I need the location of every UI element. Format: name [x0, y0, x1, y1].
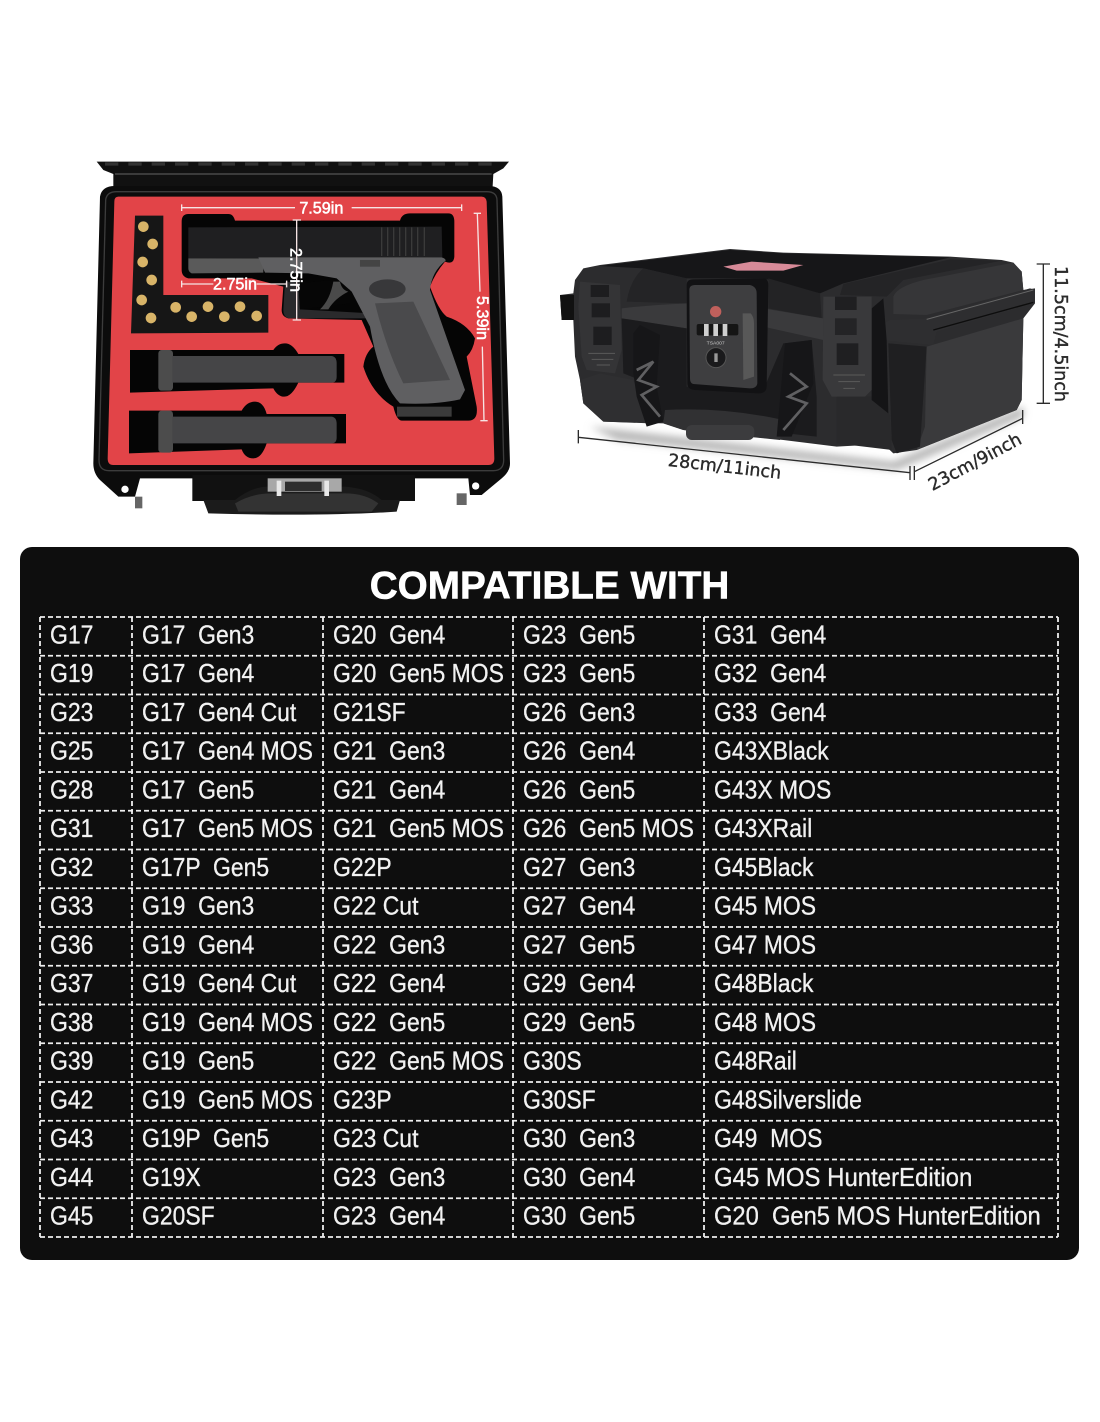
- column 2 models: G20SF: [142, 1203, 215, 1231]
- column 5 models: G33 Gen4: [714, 699, 826, 727]
- column 2 models: G17 Gen4 MOS: [142, 738, 313, 766]
- column 3 models: G23 Cut: [333, 1125, 419, 1154]
- column 1 models: G19: [50, 660, 93, 689]
- column 2 models: G17 Gen4: [142, 660, 254, 689]
- handle and latch: [192, 475, 415, 515]
- column 2 models: [142, 621, 313, 1231]
- closed case with dimensions: [560, 249, 1070, 495]
- column 4 models: G26 Gen5 MOS: [523, 815, 694, 844]
- column 1 models: G17: [50, 621, 93, 650]
- pistol: [188, 227, 465, 417]
- dimension: 2.75in horizontal: [182, 275, 287, 293]
- column 2 models: G19 Gen5: [142, 1048, 254, 1076]
- column 5 models: G47 MOS: [714, 931, 816, 960]
- column 5 models: G31 Gen4: [714, 621, 826, 650]
- column 2 models: G19 Gen5 MOS: [142, 1086, 313, 1115]
- column 5 models: G32 Gen4: [714, 660, 826, 689]
- column 5 models: G43XBlack: [714, 738, 830, 766]
- column 5 models: [714, 621, 1041, 1231]
- column 4 models: G30 Gen5: [523, 1203, 635, 1231]
- panel: compatibility list: [20, 547, 1079, 1260]
- dimension: 28cm/11inch: [578, 430, 910, 484]
- dimension: 2.75in vertical: [286, 220, 304, 320]
- column 1 models: G23: [50, 699, 93, 727]
- dimension: 2.75in vertical: 2.75in: [286, 248, 304, 292]
- column 5 models: G45Black: [714, 854, 814, 882]
- column 5 models: G48 MOS: [714, 1009, 816, 1037]
- dimension: 5.39in: [473, 213, 491, 421]
- lid top face: [600, 250, 950, 293]
- left latch: [560, 282, 622, 373]
- column 4 models: G26 Gen5: [523, 776, 635, 805]
- column 4 models: G29 Gen4: [523, 970, 635, 999]
- column 3 models: G23 Gen4: [333, 1203, 445, 1231]
- column 3 models: G22 Gen5: [333, 1009, 445, 1037]
- column 4 models: G23 Gen5: [523, 621, 635, 650]
- column 5 models: G43XRail: [714, 815, 812, 844]
- dimension: 11.5cm/4.5inch: [1037, 264, 1070, 403]
- column 2 models: G19 Gen4 Cut: [142, 970, 297, 999]
- dimension: 5.39in: 5.39in: [473, 296, 491, 340]
- column 2 models: G19P Gen5: [142, 1125, 269, 1154]
- column 1 models: G42: [50, 1086, 93, 1115]
- column 4 models: G27 Gen4: [523, 893, 635, 921]
- heading: COMPATIBLE WITH: [370, 564, 729, 608]
- column 1 models: G37: [50, 970, 93, 999]
- TSA combination lock: TSA007: [707, 341, 725, 347]
- case right side panels: [837, 263, 1035, 453]
- column 2 models: G17 Gen3: [142, 621, 254, 650]
- case lid hinge strip: [97, 162, 509, 192]
- pistol cutout: [182, 213, 477, 421]
- column 4 models: G30S: [523, 1048, 582, 1076]
- column 1 models: G31: [50, 815, 93, 844]
- column 5 models: G48Rail: [714, 1048, 797, 1076]
- column 4 models: [523, 621, 694, 1231]
- right latch: [823, 297, 872, 397]
- column 3 models: G22 Gen4: [333, 970, 445, 999]
- handle struts: [633, 325, 813, 437]
- column 2 models: G17 Gen5 MOS: [142, 815, 313, 844]
- column 3 models: G21SF: [333, 699, 406, 727]
- column 4 models: G26 Gen4: [523, 738, 635, 766]
- case silhouette: [560, 249, 1035, 453]
- column 2 models: G17P Gen5: [142, 854, 269, 882]
- column 3 models: G21 Gen3: [333, 738, 445, 766]
- column 3 models: G22 Gen5 MOS: [333, 1048, 504, 1076]
- column 1 models: G38: [50, 1009, 93, 1037]
- column 5 models: G45 MOS HunterEdition: [714, 1164, 972, 1192]
- column 1 models: G28: [50, 776, 93, 805]
- column 4 models: G23 Gen5: [523, 660, 635, 689]
- dimension: 7.59in: 7.59in: [299, 199, 343, 217]
- column 3 models: G22 Gen3: [333, 931, 445, 960]
- column 2 models: G19 Gen4: [142, 931, 254, 960]
- column 2 models: G17 Gen5: [142, 776, 254, 805]
- column 3 models: G20 Gen5 MOS: [333, 660, 504, 689]
- tool cutout with gold dots: [131, 216, 268, 333]
- dimension: 7.59in: [182, 199, 462, 217]
- dimension: 28cm/11inch: 28cm/11inch: [667, 451, 782, 484]
- magazine 2: [129, 402, 346, 458]
- TSA combination lock: [687, 278, 768, 393]
- column 3 models: G21 Gen5 MOS: [333, 815, 504, 844]
- column 5 models: G48Black: [714, 970, 814, 999]
- column 5 models: G43X MOS: [714, 776, 831, 805]
- dimension: 11.5cm/4.5inch: 11.5cm/4.5inch: [1050, 266, 1070, 402]
- column 3 models: G21 Gen4: [333, 776, 445, 805]
- table grid: [40, 617, 1058, 1237]
- case front panels: [580, 259, 1002, 440]
- column 3 models: [333, 621, 504, 1231]
- dimension: 23cm/9inch: [914, 410, 1025, 495]
- column 3 models: G22P: [333, 854, 392, 882]
- column 3 models: G22 Cut: [333, 893, 419, 921]
- red foam insert: [108, 197, 494, 465]
- column 1 models: G39: [50, 1048, 93, 1076]
- column 4 models: G27 Gen5: [523, 931, 635, 960]
- column 5 models: G49 MOS: [714, 1125, 822, 1154]
- column 2 models: G17 Gen4 Cut: [142, 699, 297, 727]
- open case with pistol foam insert: [93, 162, 510, 515]
- case body: [93, 186, 510, 508]
- column 1 models: G32: [50, 854, 93, 882]
- column 5 models: G20 Gen5 MOS HunterEdition: [714, 1203, 1041, 1231]
- dimension: 23cm/9inch: 23cm/9inch: [925, 430, 1025, 495]
- column 3 models: G23P: [333, 1086, 392, 1115]
- column 4 models: G30 Gen3: [523, 1125, 635, 1154]
- column 1 models: G33: [50, 893, 93, 921]
- column 1 models: G36: [50, 931, 93, 960]
- column 1 models: G25: [50, 738, 93, 766]
- column 2 models: G19 Gen4 MOS: [142, 1009, 313, 1037]
- floor shadow: [590, 407, 1023, 470]
- column 1 models: G45: [50, 1203, 93, 1231]
- column 5 models: G45 MOS: [714, 893, 816, 921]
- column 4 models: G30 Gen4: [523, 1164, 635, 1192]
- column 4 models: G26 Gen3: [523, 699, 635, 727]
- column 2 models: G19 Gen3: [142, 893, 254, 921]
- column 3 models: G20 Gen4: [333, 621, 445, 650]
- column 1 models: [50, 621, 93, 1231]
- sticker on lid: [723, 262, 803, 271]
- column 4 models: G30SF: [523, 1086, 596, 1115]
- column 4 models: G27 Gen3: [523, 854, 635, 882]
- magazine 1: [130, 343, 344, 397]
- dimension: 2.75in horizontal: 2.75in: [213, 275, 257, 293]
- column 5 models: G48Silverslide: [714, 1086, 862, 1115]
- column 3 models: G23 Gen3: [333, 1164, 445, 1192]
- column 1 models: G44: [50, 1164, 93, 1192]
- column 4 models: G29 Gen5: [523, 1009, 635, 1037]
- column 2 models: G19X: [142, 1164, 201, 1192]
- column 1 models: G43: [50, 1125, 93, 1154]
